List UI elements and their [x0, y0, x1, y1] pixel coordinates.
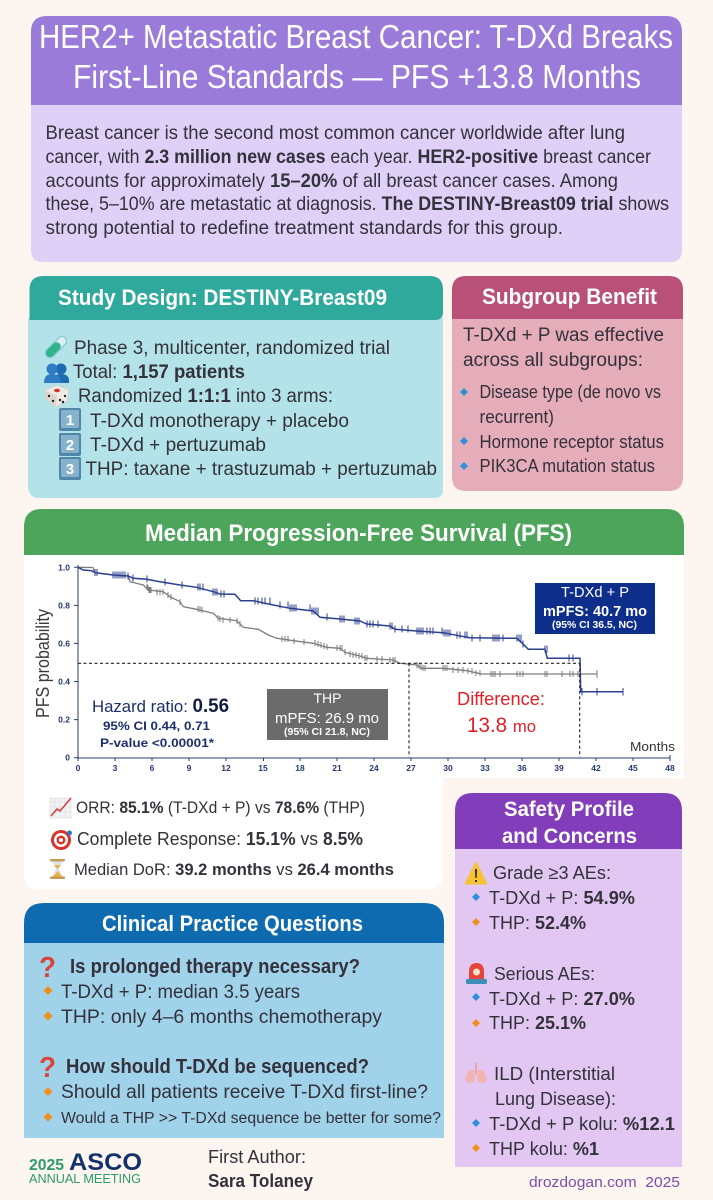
- KM chart: 24: [369, 763, 379, 773]
- serious AE values: THP: 25.1%: [489, 1012, 586, 1033]
- serious AE values: [472, 988, 635, 1033]
- panel: clinical practice questions: Is prolonged therapy necessary?: [70, 956, 360, 978]
- KM chart: 6: [150, 763, 155, 773]
- subgroup heading: [452, 276, 683, 319]
- subgroup bullet list: PIK3CA mutation status: [480, 456, 655, 476]
- blue T-DXd + P curve: [78, 567, 623, 696]
- response stats: [50, 798, 394, 879]
- ILD values: [472, 1113, 675, 1159]
- subgroup heading: Subgroup Benefit: [482, 284, 658, 309]
- icon: target: [51, 830, 72, 850]
- subgroup bullet list: Hormone receptor status: [480, 432, 664, 452]
- ILD values: T-DXd + P kolu: %12.1: [489, 1113, 675, 1134]
- icon: dice: [45, 385, 69, 407]
- first author: First Author:: [208, 1147, 306, 1167]
- hazard ratio text: [92, 696, 229, 750]
- KM chart: 15: [258, 763, 268, 773]
- serious AE values: T-DXd + P: 27.0%: [489, 988, 635, 1009]
- icon: keycap 2: [59, 433, 81, 456]
- difference callout: 13.8 mo: [467, 714, 536, 737]
- icon: chart: [50, 798, 71, 818]
- logo: ASCO annual meeting: 2025: [29, 1157, 64, 1174]
- icon: warning: [465, 862, 487, 884]
- ILD values: THP kolu: %1: [489, 1138, 599, 1159]
- KM chart: 39: [554, 763, 564, 773]
- difference callout: Difference:: [457, 689, 545, 709]
- T-DXd + P callout: mPFS: 40.7 mo: [543, 603, 647, 620]
- KM chart: 21: [332, 763, 342, 773]
- intro text: Breast cancer is the second most common cancer worldwide after lung: [46, 123, 625, 144]
- THP callout: [267, 689, 388, 740]
- panel: safety profile: Grade ≥3 AEs:: [493, 862, 611, 883]
- KM chart: 0.6: [58, 638, 70, 648]
- panel: study design: [28, 276, 443, 498]
- panel: study design: Randomized 1:1:1 into 3 arms:: [78, 386, 333, 407]
- panel: safety profile: [455, 793, 682, 1167]
- T-DXd + P callout: [535, 583, 655, 634]
- KM chart: 36: [517, 763, 527, 773]
- KM chart: 33: [480, 763, 490, 773]
- safety heading: [455, 793, 682, 849]
- subgroup bullet list: [460, 382, 664, 476]
- KM chart: [33, 562, 676, 773]
- first author: Sara Tolaney: [208, 1171, 313, 1191]
- KM chart: 3: [113, 763, 118, 773]
- icon: keycap 1: [59, 408, 81, 431]
- clinical heading: [24, 903, 444, 943]
- panel: subgroup benefit: [452, 276, 683, 491]
- subgroup bullet list: recurrent): [480, 407, 554, 427]
- question 1 answers: [44, 982, 382, 1028]
- response stats: Median DoR: 39.2 months vs 26.4 months: [74, 860, 394, 879]
- intro text: these, 5–10% are metastatic at diagnosis. The DESTINY-Breast09 trial shows: [46, 194, 669, 215]
- icon: keycap 3: [59, 457, 81, 480]
- y axis label: PFS probability: [33, 609, 53, 718]
- icon: test tube: [44, 335, 68, 359]
- T-DXd + P callout: T-DXd + P: [561, 584, 629, 601]
- panel: subgroup benefit: T-DXd + P was effective: [463, 325, 664, 346]
- panel: clinical practice questions: How should T-DXd be sequenced?: [66, 1056, 369, 1078]
- KM chart: 30: [443, 763, 453, 773]
- panel: subgroup benefit: across all subgroups:: [463, 350, 643, 371]
- icon: keycap 2: 2: [66, 437, 74, 454]
- panel: introduction: [31, 16, 682, 262]
- logo: ASCO annual meeting: [29, 1149, 142, 1186]
- question 1 answers: THP: only 4–6 months chemotherapy: [61, 1007, 382, 1028]
- grade 3 values: [472, 887, 635, 933]
- first author: [208, 1147, 313, 1191]
- title banner: First-Line Standards — PFS +13.8 Months: [73, 58, 641, 95]
- icon: question mark: ?: [39, 952, 56, 984]
- difference callout: [457, 689, 545, 737]
- icon: patients: [44, 364, 69, 383]
- icon: keycap 1: 1: [66, 412, 74, 429]
- icon: question mark 2: ?: [39, 1052, 56, 1084]
- intro text: [46, 123, 669, 239]
- KM chart: 0.8: [58, 600, 70, 610]
- panel: study design: T-DXd + pertuzumab: [90, 435, 266, 456]
- panel: safety profile: ILD (Interstitial: [494, 1063, 615, 1084]
- panel: study design: THP: taxane + trastuzumab + pertuzumab: [86, 459, 437, 480]
- intro text: cancer, with 2.3 million new cases each year. HER2-positive breast cancer: [46, 147, 652, 168]
- months label: Months: [630, 739, 676, 754]
- KM chart: 48: [665, 763, 675, 773]
- safety heading: and Concerns: [502, 825, 637, 848]
- gray THP curve: [78, 567, 597, 678]
- KM chart: 42: [591, 763, 601, 773]
- hazard ratio text: Hazard ratio: 0.56: [92, 696, 229, 717]
- icon: hourglass: [50, 859, 65, 879]
- panel: median PFS: [24, 509, 684, 889]
- KM chart: 18: [295, 763, 305, 773]
- question 2 answers: Would a THP >> T-DXd sequence be better for some?: [61, 1110, 441, 1127]
- THP callout: (95% CI 21.8, NC): [284, 727, 370, 738]
- website credit: drozdogan.com 2025: [529, 1174, 680, 1191]
- KM chart: 0: [76, 763, 81, 773]
- intro text: strong potential to redefine treatment standards for this group.: [46, 218, 563, 239]
- response stats: ORR: 85.1% (T-DXd + P) vs 78.6% (THP): [76, 798, 365, 817]
- clinical heading: Clinical Practice Questions: [102, 911, 363, 936]
- THP callout: mPFS: 26.9 mo: [275, 710, 379, 727]
- study design heading: [30, 276, 443, 320]
- safety heading: Safety Profile: [504, 798, 634, 821]
- KM chart: 0: [65, 752, 70, 762]
- icon: siren: [466, 963, 487, 984]
- hazard ratio text: 95% CI 0.44, 0.71: [103, 719, 210, 733]
- KM chart: 27: [406, 763, 416, 773]
- KM chart: 1.0: [58, 562, 70, 572]
- logo: ASCO annual meeting: ANNUAL MEETING: [29, 1171, 141, 1186]
- panel: study design: Phase 3, multicenter, randomized trial: [74, 338, 390, 359]
- question 2 answers: [44, 1082, 441, 1127]
- panel: safety profile: Lung Disease):: [495, 1088, 616, 1109]
- grade 3 values: T-DXd + P: 54.9%: [489, 887, 635, 908]
- subgroup bullet list: Disease type (de novo vs: [480, 382, 661, 402]
- T-DXd + P callout: (95% CI 36.5, NC): [552, 620, 637, 631]
- KM chart: 9: [187, 763, 192, 773]
- panel: study design: Total: 1,157 patients: [73, 362, 245, 383]
- intro text: accounts for approximately 15–20% of all breast cancer cases. Among: [46, 171, 618, 192]
- KM chart: 45: [628, 763, 638, 773]
- logo: ASCO annual meeting: ASCO: [69, 1149, 142, 1176]
- KM chart: 0.2: [58, 714, 70, 724]
- PFS heading: Median Progression-Free Survival (PFS): [145, 520, 572, 547]
- question 2 answers: Should all patients receive T-DXd first-line?: [61, 1082, 428, 1103]
- panel: clinical practice questions: [24, 903, 444, 1138]
- response stats: Complete Response: 15.1% vs 8.5%: [77, 829, 363, 849]
- PFS heading: [24, 509, 684, 555]
- panel: study design: T-DXd monotherapy + placebo: [90, 411, 349, 432]
- study design heading: Study Design: DESTINY-Breast09: [58, 285, 387, 310]
- THP callout: THP: [314, 690, 342, 706]
- title banner: [31, 16, 682, 105]
- KM chart: 12: [221, 763, 231, 773]
- panel: safety profile: Serious AEs:: [494, 963, 595, 984]
- KM chart: 0.4: [58, 676, 70, 686]
- question 1 answers: T-DXd + P: median 3.5 years: [61, 982, 300, 1003]
- icon: lungs: [466, 1063, 486, 1083]
- median reference lines: [78, 663, 580, 757]
- hazard ratio text: P-value <0.00001*: [100, 736, 214, 750]
- grade 3 values: THP: 52.4%: [489, 912, 586, 933]
- icon: keycap 3: 3: [66, 461, 74, 478]
